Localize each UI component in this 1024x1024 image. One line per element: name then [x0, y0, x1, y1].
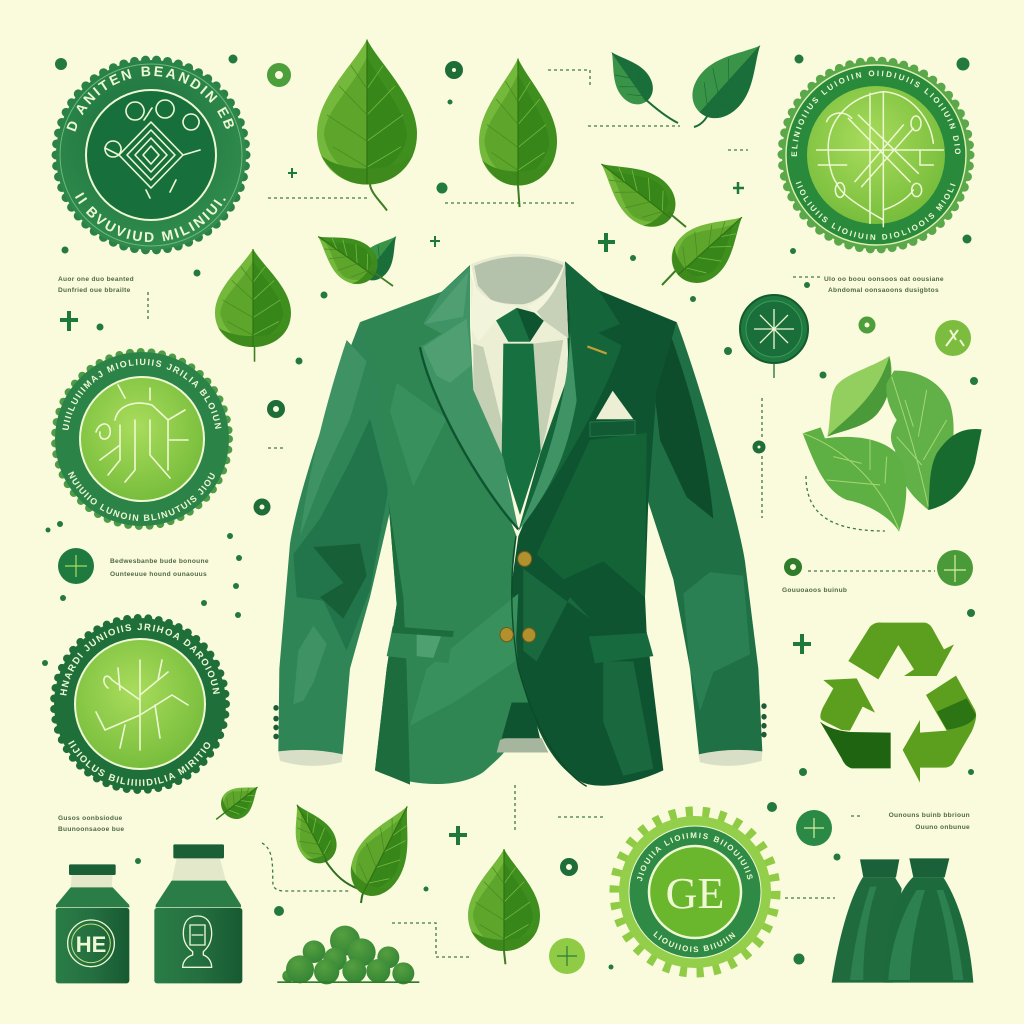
body right facets — [523, 569, 653, 776]
leaf pair top right — [598, 29, 779, 129]
recycling symbol — [820, 622, 976, 783]
lapel left — [420, 267, 518, 529]
cuff buttons — [273, 703, 767, 739]
caption: mid left — [110, 558, 209, 578]
sleeve right highlight — [683, 572, 750, 711]
badge emblem — [96, 660, 188, 750]
caption: mid left: Ounteeuue hound ounaouus — [110, 571, 207, 578]
stem — [372, 271, 393, 286]
caption: top left — [58, 276, 134, 294]
neck — [172, 858, 226, 882]
leaf left veins — [803, 433, 899, 530]
bottles — [56, 844, 242, 983]
caption: bottom left: Buunoonsaooe bue — [58, 826, 124, 833]
leaf: top centre — [479, 58, 557, 207]
caption: top right: Ulo oo boou oonsoos oat oousiane — [824, 276, 944, 283]
tie — [496, 308, 544, 515]
leaf right — [340, 795, 430, 905]
badge text bottom: IIOLIUIIS LIOIIUIN DIOLIOOIS MIOLI — [796, 181, 956, 240]
leaf light — [306, 219, 386, 293]
caption: top right: Abndomal oonsaoons dusigbtos — [828, 287, 939, 294]
leaf right — [681, 29, 779, 129]
bottle left — [56, 864, 129, 983]
caption: bottom right — [889, 812, 970, 831]
buttons — [500, 551, 536, 642]
leaf top — [827, 356, 892, 437]
leaf pair bottom — [280, 795, 430, 905]
body left panel — [360, 265, 530, 784]
plus signs — [60, 168, 811, 845]
pin — [587, 346, 607, 354]
leaf cluster right — [803, 356, 982, 532]
pocket flap right — [587, 626, 653, 663]
sleeve left highlight — [293, 340, 367, 704]
dashed connector lines — [148, 70, 935, 957]
body left shading — [375, 501, 410, 785]
stem — [662, 212, 686, 285]
lapel right highlight — [518, 333, 577, 531]
bag left folds — [850, 887, 877, 980]
badge text bottom: NUIUIIO LUNOIN BLINUTUIS JIOU — [68, 471, 215, 521]
label ring — [68, 920, 114, 967]
stem — [325, 860, 372, 903]
badge text bottom: II BVUVIUD MILINIUI. — [75, 192, 226, 242]
icon: bottom plus circle — [796, 810, 832, 846]
collar points — [470, 261, 568, 342]
pile of peas — [277, 926, 419, 984]
label glyph: HE — [76, 932, 106, 957]
shirt — [470, 261, 572, 469]
badge: top-left dark seal — [52, 56, 250, 254]
icon circles with plus — [58, 320, 973, 974]
arrow right — [903, 676, 976, 783]
caption: right mid: Gouuoaoos buinub — [782, 587, 847, 594]
body left facets — [390, 383, 518, 726]
pocket square — [596, 391, 633, 419]
arrow top — [848, 622, 954, 679]
collar inner — [473, 255, 568, 308]
badge: lower-left lime seal — [50, 614, 230, 794]
sleeve left — [278, 322, 393, 754]
badge text top: D ANITEN BEANDIN EB — [66, 66, 234, 132]
bag right collar — [909, 858, 949, 877]
leaf lower — [661, 198, 759, 294]
leaf pair upper right — [586, 144, 759, 294]
body — [154, 908, 242, 983]
caption: bottom left — [58, 815, 124, 833]
garment bags — [832, 858, 973, 983]
caption: top left: Dunfried oue bbrailte — [58, 287, 131, 294]
leaf upper — [586, 144, 686, 238]
badge text bottom: LIOUIIOIS BIIUIIN — [653, 931, 736, 952]
badge text top: ELINIOIIUS LUIOIIN OIIDIUIIS LIOIIUIN DIO — [791, 70, 961, 156]
label icon — [183, 916, 212, 967]
badge: top-right lime seal — [778, 56, 974, 254]
bag right folds — [888, 890, 963, 980]
cap — [69, 864, 116, 875]
jacket illustration — [273, 255, 767, 786]
leaf bottom centre — [468, 849, 540, 964]
leaf: left mid — [215, 249, 291, 362]
medal: star icon — [740, 295, 808, 378]
caption: bottom right: Ouuno onbunue — [915, 824, 970, 831]
bag left — [832, 877, 902, 983]
leaf large — [886, 371, 954, 510]
ring dots — [256, 64, 872, 873]
icon: bottom lime plus circle — [549, 938, 585, 974]
arrow right shade — [937, 698, 976, 729]
arrow left band — [820, 722, 891, 768]
caption: bottom right: Ounouns buinb bbrioun — [889, 812, 970, 819]
inner vest — [502, 702, 540, 738]
leaf top shade — [827, 356, 891, 437]
lapel left edge — [420, 347, 518, 529]
lapel right — [518, 261, 622, 531]
caption: bottom left: Gusos oonbsiodue — [58, 815, 123, 822]
badge emblem — [96, 385, 188, 482]
icon: left plus circle — [58, 548, 94, 584]
shirt shading — [473, 340, 563, 461]
bag left collar — [860, 859, 899, 877]
badge emblem — [817, 92, 943, 227]
sleeve left fold — [313, 544, 367, 619]
bag right — [883, 877, 973, 983]
label inner ring — [72, 924, 110, 963]
body right pocket area — [537, 433, 647, 597]
caption: mid left: Bedwesbanbe bude bonoune — [110, 558, 209, 565]
badge text top: UIIILUIIIMAJ MIOLIUIIS JRILIA BLOIUN — [62, 358, 222, 430]
arrow left — [820, 678, 875, 731]
caption: top right — [824, 276, 944, 294]
icon: right plus circle — [937, 550, 973, 586]
leaf large veins — [892, 377, 947, 507]
cap — [173, 844, 224, 858]
badge: mid-left lime seal — [51, 348, 233, 530]
leaf dark — [352, 227, 408, 287]
sleeve right — [647, 322, 762, 754]
leaf left — [598, 43, 660, 111]
leaf left — [803, 427, 906, 532]
body bottom gap — [497, 736, 548, 752]
badge emblem — [105, 108, 200, 198]
ground line — [277, 981, 419, 983]
badge emblem circles — [105, 100, 199, 157]
body right panel — [512, 261, 677, 786]
leaf dark — [928, 429, 982, 510]
bottle right — [154, 844, 242, 983]
leaf left — [280, 796, 344, 870]
caption: top left: Auor one duo beanted — [58, 276, 134, 283]
badge monogram: GE — [666, 869, 724, 918]
icon: lime sprig circle — [935, 320, 971, 356]
neck — [71, 875, 113, 888]
leaf pair near collar — [306, 219, 408, 293]
body — [56, 908, 129, 983]
breast pocket — [590, 420, 635, 436]
badge text top: JIOUIIA LIOIIMIS BIIOUIUIIS — [637, 832, 753, 882]
front edge — [512, 536, 587, 786]
stem — [644, 98, 712, 127]
shoulder — [56, 887, 129, 907]
leaf: top large — [317, 39, 417, 211]
shirt cuffs — [278, 749, 762, 766]
leaf small bottom left — [207, 775, 267, 831]
shoulder — [156, 881, 241, 907]
pocket flap left — [387, 626, 454, 663]
badge text top: HNARDI JUNIOIIS JRIHOA DAROIOUN — [60, 624, 220, 696]
lapel left highlight — [423, 272, 472, 383]
badge text bottom: IIJIOLUS BILIIIIIDILIA MIRITIO — [68, 740, 210, 786]
sleeve left shading — [293, 419, 388, 651]
badge: bottom gear seal — [610, 806, 780, 978]
sleeve right shading — [653, 333, 713, 519]
